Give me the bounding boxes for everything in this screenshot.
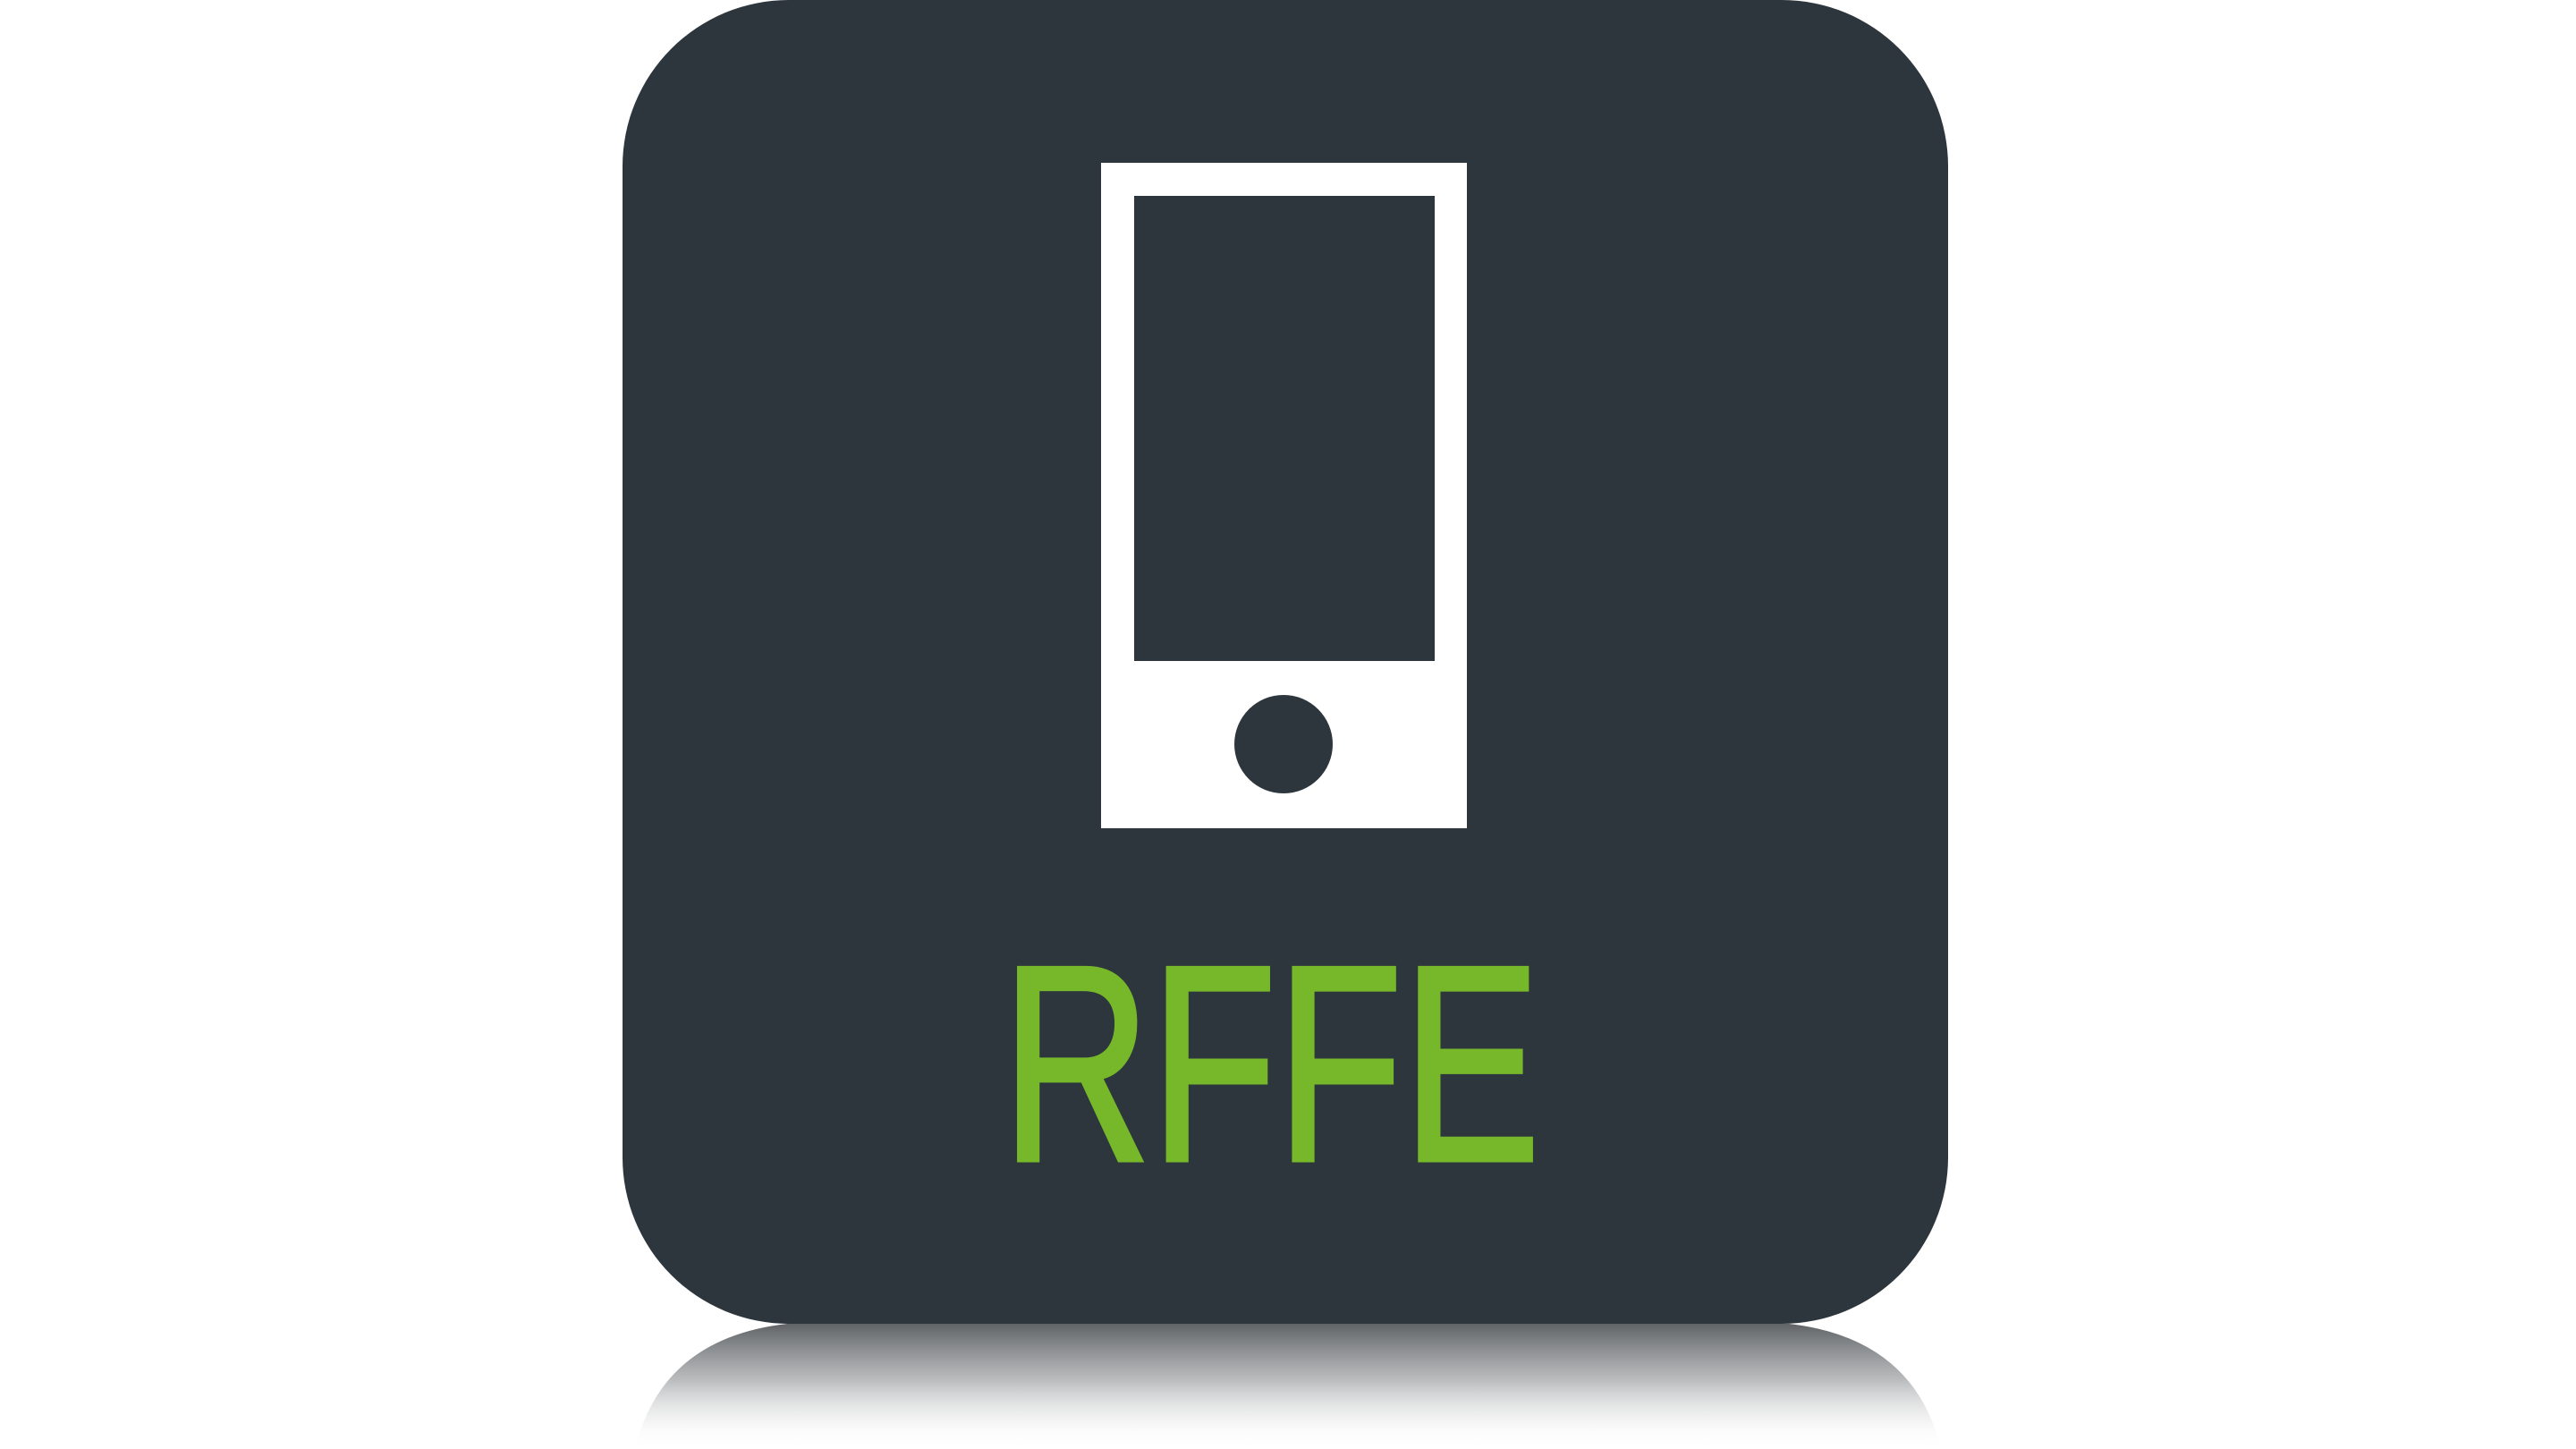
reflection: [635, 1324, 1941, 1449]
label: RFFE: RFFE: [1002, 909, 1540, 1220]
rounded square background: [623, 0, 1948, 1324]
icon: mobile phone: [1101, 163, 1467, 828]
